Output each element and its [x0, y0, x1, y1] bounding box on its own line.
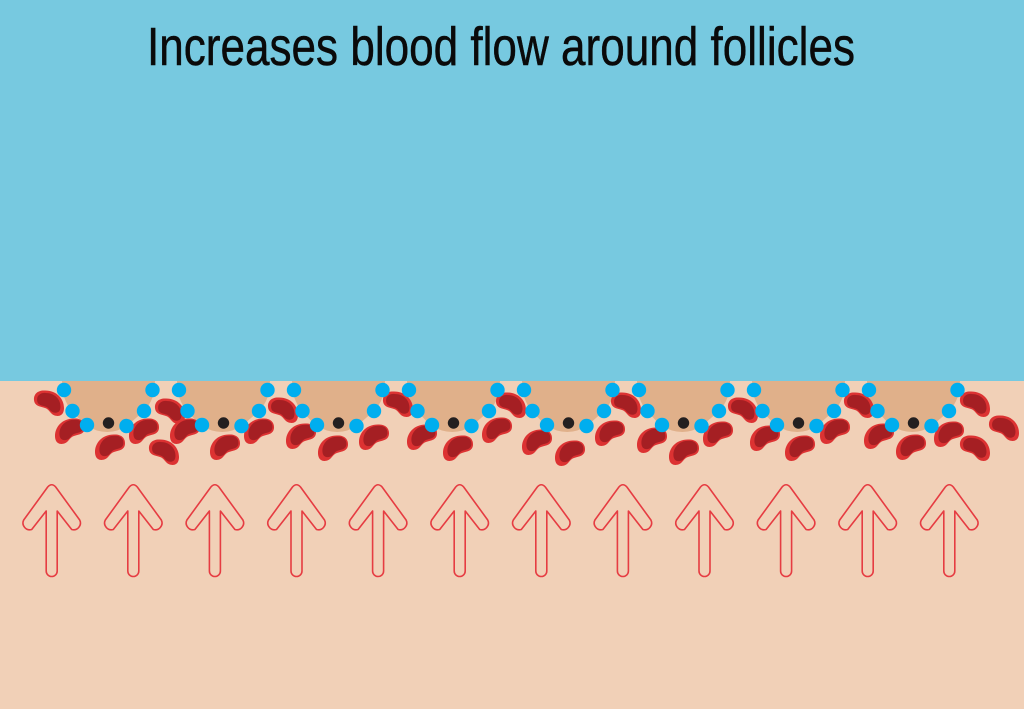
title: Increases blood flow around follicles: [147, 17, 855, 77]
red blood cells: [34, 390, 1019, 466]
panel: skin background: [0, 381, 1024, 709]
follicle basins: [62, 381, 960, 432]
upward arrows: [23, 485, 978, 576]
panel: sky blue upper area: [0, 0, 1024, 381]
blue and black follicle dots: [57, 383, 965, 433]
